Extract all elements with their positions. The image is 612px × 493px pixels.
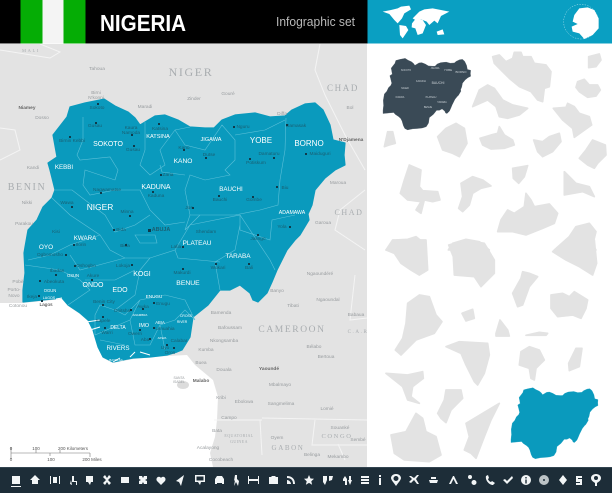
cities inside Nigeria: Nagwamatse — [93, 187, 121, 193]
cities inside Nigeria: Awka — [137, 304, 149, 310]
neighbouring cities: Zinder — [187, 96, 201, 102]
state labels: BAYELSA — [109, 358, 123, 362]
icon: diamond — [559, 475, 567, 485]
footer icon bar — [0, 467, 612, 493]
icon: airplane — [409, 475, 419, 484]
panel: grey state silhouettes, lower — [386, 240, 597, 462]
icon: rss — [287, 476, 295, 484]
icon: pin — [591, 474, 601, 486]
neighbouring cities: Malabo — [193, 378, 209, 384]
neighbouring cities: Bol — [347, 105, 353, 111]
neighbouring cities: Maradi — [138, 104, 152, 110]
cities inside Nigeria: Makurdi — [173, 270, 191, 276]
neighbouring cities: Ebolowa — [235, 399, 254, 405]
state labels: DELTA — [110, 325, 126, 331]
state labels: KEBBI — [55, 164, 73, 171]
neighbouring cities: SANTA — [173, 376, 185, 380]
state labels: SOKOTO — [93, 141, 123, 148]
cities inside Nigeria: Gusau — [88, 123, 102, 129]
panel: grey state silhouettes, upper — [384, 52, 606, 250]
icon: check — [503, 476, 513, 484]
icon: cross arrows — [139, 476, 147, 484]
icon: walking person — [234, 475, 239, 486]
neighbouring cities: Nkongsamba — [210, 338, 238, 344]
cities inside Nigeria: Ibadan — [50, 268, 65, 274]
neighbouring cities: Babaua — [348, 312, 365, 318]
state labels: NIGER — [87, 202, 113, 212]
cities inside Nigeria: Ilorin — [76, 242, 87, 248]
neighbouring cities: Cocobeach — [209, 457, 233, 463]
cities inside Nigeria: Sokoto — [90, 105, 105, 111]
icon: restaurant — [50, 476, 60, 484]
state labels: ADAMAWA — [279, 210, 306, 216]
neighbouring cities: Pobè — [12, 279, 24, 285]
country labels: CHAD — [327, 83, 359, 93]
country labels: CONGO — [321, 433, 353, 440]
state labels: TARABA — [225, 253, 251, 260]
mini map: dark Nigeria with state labels: BENUE — [424, 106, 433, 109]
state labels: RIVER — [177, 320, 188, 324]
cities inside Nigeria: Uyo — [161, 345, 170, 351]
cities inside Nigeria: Kaduna — [148, 193, 165, 199]
neighbouring cities: Oyem — [271, 435, 283, 441]
neighbouring cities: Lomié — [320, 406, 334, 412]
cities inside Nigeria: Abeokuta — [44, 279, 64, 285]
state labels: YOBE — [250, 136, 272, 145]
mini map: dark Nigeria with state labels: KADUNA — [416, 80, 426, 83]
country labels: MALI — [22, 48, 40, 53]
mini map: dark Nigeria with state labels: JIGAWA — [430, 67, 440, 70]
neighbouring cities: Bertoua — [318, 354, 335, 360]
scale bar — [10, 446, 102, 462]
state labels: AKWA — [158, 336, 166, 340]
neighbouring cities: ISABEL — [173, 380, 185, 384]
cities inside Nigeria: Sapele — [96, 318, 111, 324]
cities inside Nigeria: Namoda — [122, 130, 140, 136]
country labels: GUINEA — [230, 439, 248, 444]
icon: info circle — [521, 475, 531, 485]
neighbouring cities: Campo — [221, 415, 237, 421]
map: Nigeria — [23, 99, 345, 362]
mini map: dark Nigeria with state labels — [383, 58, 471, 130]
mini map: dark Nigeria with state labels: YOBE — [444, 68, 452, 72]
state labels: ANAMBRA — [133, 313, 147, 317]
state labels: IMO — [139, 323, 149, 329]
icon: home — [30, 475, 40, 484]
country labels: C.A.R — [348, 330, 368, 335]
cities inside Nigeria: Oron — [165, 350, 176, 356]
icon: dollar — [576, 476, 582, 485]
scale bar: 100 — [32, 446, 40, 451]
neighbouring cities: Porto- — [7, 287, 21, 293]
cities inside Nigeria: Akure — [87, 273, 100, 279]
icon: bed — [248, 476, 259, 484]
cities inside Nigeria: Damasak — [286, 123, 307, 129]
neighbouring cities: Douala — [216, 367, 232, 373]
icon: person seated — [70, 476, 77, 485]
icon: phone — [486, 475, 495, 485]
state labels: JIGAWA — [200, 137, 222, 143]
state labels — [39, 134, 324, 362]
cities inside Nigeria: Dutse — [203, 152, 216, 158]
cities inside Nigeria: Bida — [120, 243, 130, 249]
scale bar: 0 — [10, 457, 13, 462]
cities inside Nigeria: Oshogbo — [76, 263, 96, 269]
cities inside Nigeria: Jalingo — [250, 236, 266, 242]
neighbouring cities: Sangmelima — [268, 401, 295, 407]
country labels — [8, 48, 368, 452]
cities inside Nigeria: Damaturu — [258, 151, 280, 157]
icon: location ring — [391, 474, 401, 486]
icon: radiation — [539, 475, 549, 485]
scale bar: 100 — [47, 457, 55, 462]
cities inside Nigeria: Birnin Kebbi — [59, 138, 85, 144]
neighbouring cities: Cotonou — [9, 303, 27, 309]
neighbouring cities: Parakou — [15, 221, 33, 227]
neighbouring cities: Banyo — [270, 288, 284, 294]
icon: up down arrows — [343, 476, 352, 485]
cities inside Nigeria: Minna — [120, 209, 134, 215]
cities inside Nigeria — [27, 105, 331, 356]
neighbouring cities: N'konni — [88, 95, 104, 101]
state labels: OGUN — [44, 288, 56, 293]
cities inside Nigeria: Zaria — [163, 172, 174, 178]
cities inside Nigeria: Katsina — [152, 126, 168, 132]
cities inside Nigeria: Potiskum — [246, 160, 266, 166]
state labels: RIVERS — [106, 345, 130, 352]
cities inside Nigeria: Enugu — [156, 301, 170, 307]
mini map: blue Nigeria — [511, 388, 598, 459]
cities inside Nigeria: Ogbomosho — [37, 252, 63, 258]
ocean — [0, 299, 218, 467]
cities inside Nigeria: Lokoja — [116, 263, 130, 269]
state labels: BORNO — [294, 139, 324, 148]
cities inside Nigeria: Jos — [185, 205, 193, 211]
cities inside Nigeria: Yola — [277, 224, 287, 230]
icon: info — [379, 475, 381, 485]
mini map: dark Nigeria with state labels: PLATEAU — [426, 96, 437, 99]
neighbouring cities: Bélabo — [307, 344, 322, 350]
icon: camera — [269, 476, 278, 484]
cities inside Nigeria: Aba — [141, 337, 150, 343]
icon: train — [11, 476, 21, 487]
neighbouring cities: N'Djamena — [339, 137, 364, 143]
neighbouring cities: Niamey — [18, 105, 36, 111]
neighbouring cities: Kribi — [216, 395, 226, 401]
cities inside Nigeria: Gusau — [126, 147, 140, 153]
cities inside Nigeria: Gombe — [246, 197, 262, 203]
cities inside Nigeria: Ikeja — [27, 294, 37, 300]
neighbouring cities: Bamenda — [211, 310, 232, 316]
state labels: ONDO — [82, 282, 104, 289]
country labels: NIGER — [169, 65, 213, 79]
header: black title bar — [0, 0, 368, 44]
cities inside Nigeria: Biu — [282, 185, 289, 191]
icon: list — [361, 476, 369, 484]
neighbouring cities: Novo — [8, 293, 20, 299]
neighbouring cities: Nikki — [22, 200, 32, 206]
cities inside Nigeria: Bida — [116, 227, 126, 233]
neighbouring cities: Gouré — [221, 91, 235, 97]
neighbouring cities: Yaoundé — [259, 366, 279, 372]
state labels: KANO — [174, 158, 192, 165]
cities inside Nigeria: Bali — [245, 265, 253, 271]
neighbouring cities: Kumba — [198, 347, 214, 353]
icon: world map — [383, 6, 449, 38]
neighbouring cities: Mekambo — [327, 454, 349, 460]
subtitle: Infographic set — [276, 15, 356, 29]
icon: cross — [103, 475, 111, 485]
cities inside Nigeria: Lagos — [39, 302, 53, 308]
country labels: EQUATORIAL — [224, 433, 254, 438]
cities inside Nigeria: Wukari — [211, 265, 225, 271]
cities inside Nigeria: Kisi — [52, 229, 60, 235]
panel: map background — [0, 44, 367, 467]
icon: speech pin — [86, 476, 93, 485]
icon: car — [215, 476, 224, 484]
mini map: dark Nigeria with state labels: TARABA — [437, 101, 447, 104]
neighbouring cities: Buea — [195, 360, 207, 366]
title: NIGERIA — [100, 10, 186, 36]
cities inside Nigeria: Calabar — [171, 338, 188, 344]
coast creeks — [56, 298, 150, 362]
country labels: CHAD — [334, 208, 364, 217]
icon: chat — [195, 475, 205, 485]
neighbouring cities: Acalayong — [197, 445, 220, 451]
icon: link — [468, 475, 476, 485]
icon: star — [304, 475, 314, 485]
icon: ship — [429, 477, 438, 483]
flag of Nigeria — [20, 0, 86, 44]
state labels: OYO — [39, 244, 53, 251]
cities inside Nigeria: Wawa — [60, 200, 74, 206]
neighbouring cities: Mbalmayo — [269, 382, 291, 388]
cities inside Nigeria: Shendam — [196, 229, 216, 235]
cities inside Nigeria: Bauchi — [213, 197, 227, 203]
state labels: EDO — [112, 287, 128, 294]
state labels: KATSINA — [146, 134, 170, 140]
state boundaries — [25, 117, 295, 350]
icon: globe — [564, 4, 599, 39]
mini map: dark Nigeria with state labels: BORNO — [455, 70, 467, 74]
icon: envelope — [121, 477, 129, 483]
neighbouring cities: Ngaoundéré — [307, 271, 334, 277]
cities inside Nigeria: Kaura — [125, 125, 138, 131]
country labels: GABON — [272, 444, 304, 452]
country labels: CAMEROON — [258, 325, 326, 335]
cities inside Nigeria: Nguru — [236, 124, 250, 130]
neighbouring cities: Kandi — [27, 165, 39, 171]
scale bar: 200 Miles — [82, 457, 102, 462]
icon: send arrow — [176, 475, 184, 486]
neighbouring cities: Souanké — [331, 425, 350, 431]
cities inside Nigeria: ABUJA — [152, 227, 170, 233]
scale bar: 0 — [10, 446, 13, 451]
neighbouring cities: Sembé — [350, 437, 366, 443]
cities inside Nigeria: Owerri — [128, 331, 142, 337]
neighbouring cities: Garoua — [315, 220, 331, 226]
cities inside Nigeria: Kano — [178, 145, 190, 151]
state labels: BENUE — [176, 280, 200, 287]
state labels: KWARA — [74, 235, 97, 242]
neighbouring cities: Tahoua — [89, 66, 105, 72]
header: blue panel — [368, 0, 612, 44]
neighbouring cities: Maroua — [330, 180, 346, 186]
state labels: LAGOS — [43, 296, 56, 300]
scale bar: 200 Kilometers — [58, 446, 89, 451]
state labels: CROSS — [180, 314, 193, 318]
mini map: dark Nigeria with state labels: KWARA — [396, 96, 405, 99]
neighbouring cities: Diffa — [277, 111, 287, 117]
state labels: PLATEAU — [183, 240, 212, 247]
state labels: KOGI — [133, 271, 151, 278]
state labels: BAUCHI — [219, 186, 243, 193]
neighbouring cities: Ngaoundal — [316, 297, 340, 303]
neighbouring cities: Bafoussam — [218, 325, 242, 331]
mini map: dark Nigeria with state labels: SOKOTO — [401, 69, 411, 72]
cities inside Nigeria: Lafia — [171, 244, 182, 250]
state labels: ABIA — [155, 320, 165, 325]
neighbouring cities: Bata — [212, 428, 222, 434]
neighbouring cities — [7, 66, 366, 463]
neighbouring cities: Birni — [91, 90, 101, 96]
neighbouring cities: Dosso — [35, 115, 49, 121]
icon: heart — [156, 477, 166, 485]
cities inside Nigeria: Onitsha — [114, 308, 131, 314]
country labels: BENIN — [8, 182, 46, 193]
icon: tent — [449, 476, 458, 484]
state labels: OSUN — [67, 273, 79, 278]
mini map: dark Nigeria with state labels: NIGER — [401, 87, 409, 90]
cities inside Nigeria: Benin City — [93, 299, 116, 305]
state labels: ENUGU — [146, 294, 162, 299]
icon: globe map — [323, 476, 333, 485]
cities inside Nigeria: Umuahia — [155, 326, 175, 332]
cities inside Nigeria: Warri — [101, 330, 113, 336]
city dots — [38, 103, 307, 349]
state labels: KADUNA — [141, 184, 171, 191]
mini map: dark Nigeria with state labels: BAUCHI — [432, 81, 444, 85]
neighbouring cities: Belinga — [304, 452, 320, 458]
neighbouring cities: Tibati — [287, 303, 299, 309]
cities inside Nigeria: Maiduguri — [309, 151, 331, 157]
